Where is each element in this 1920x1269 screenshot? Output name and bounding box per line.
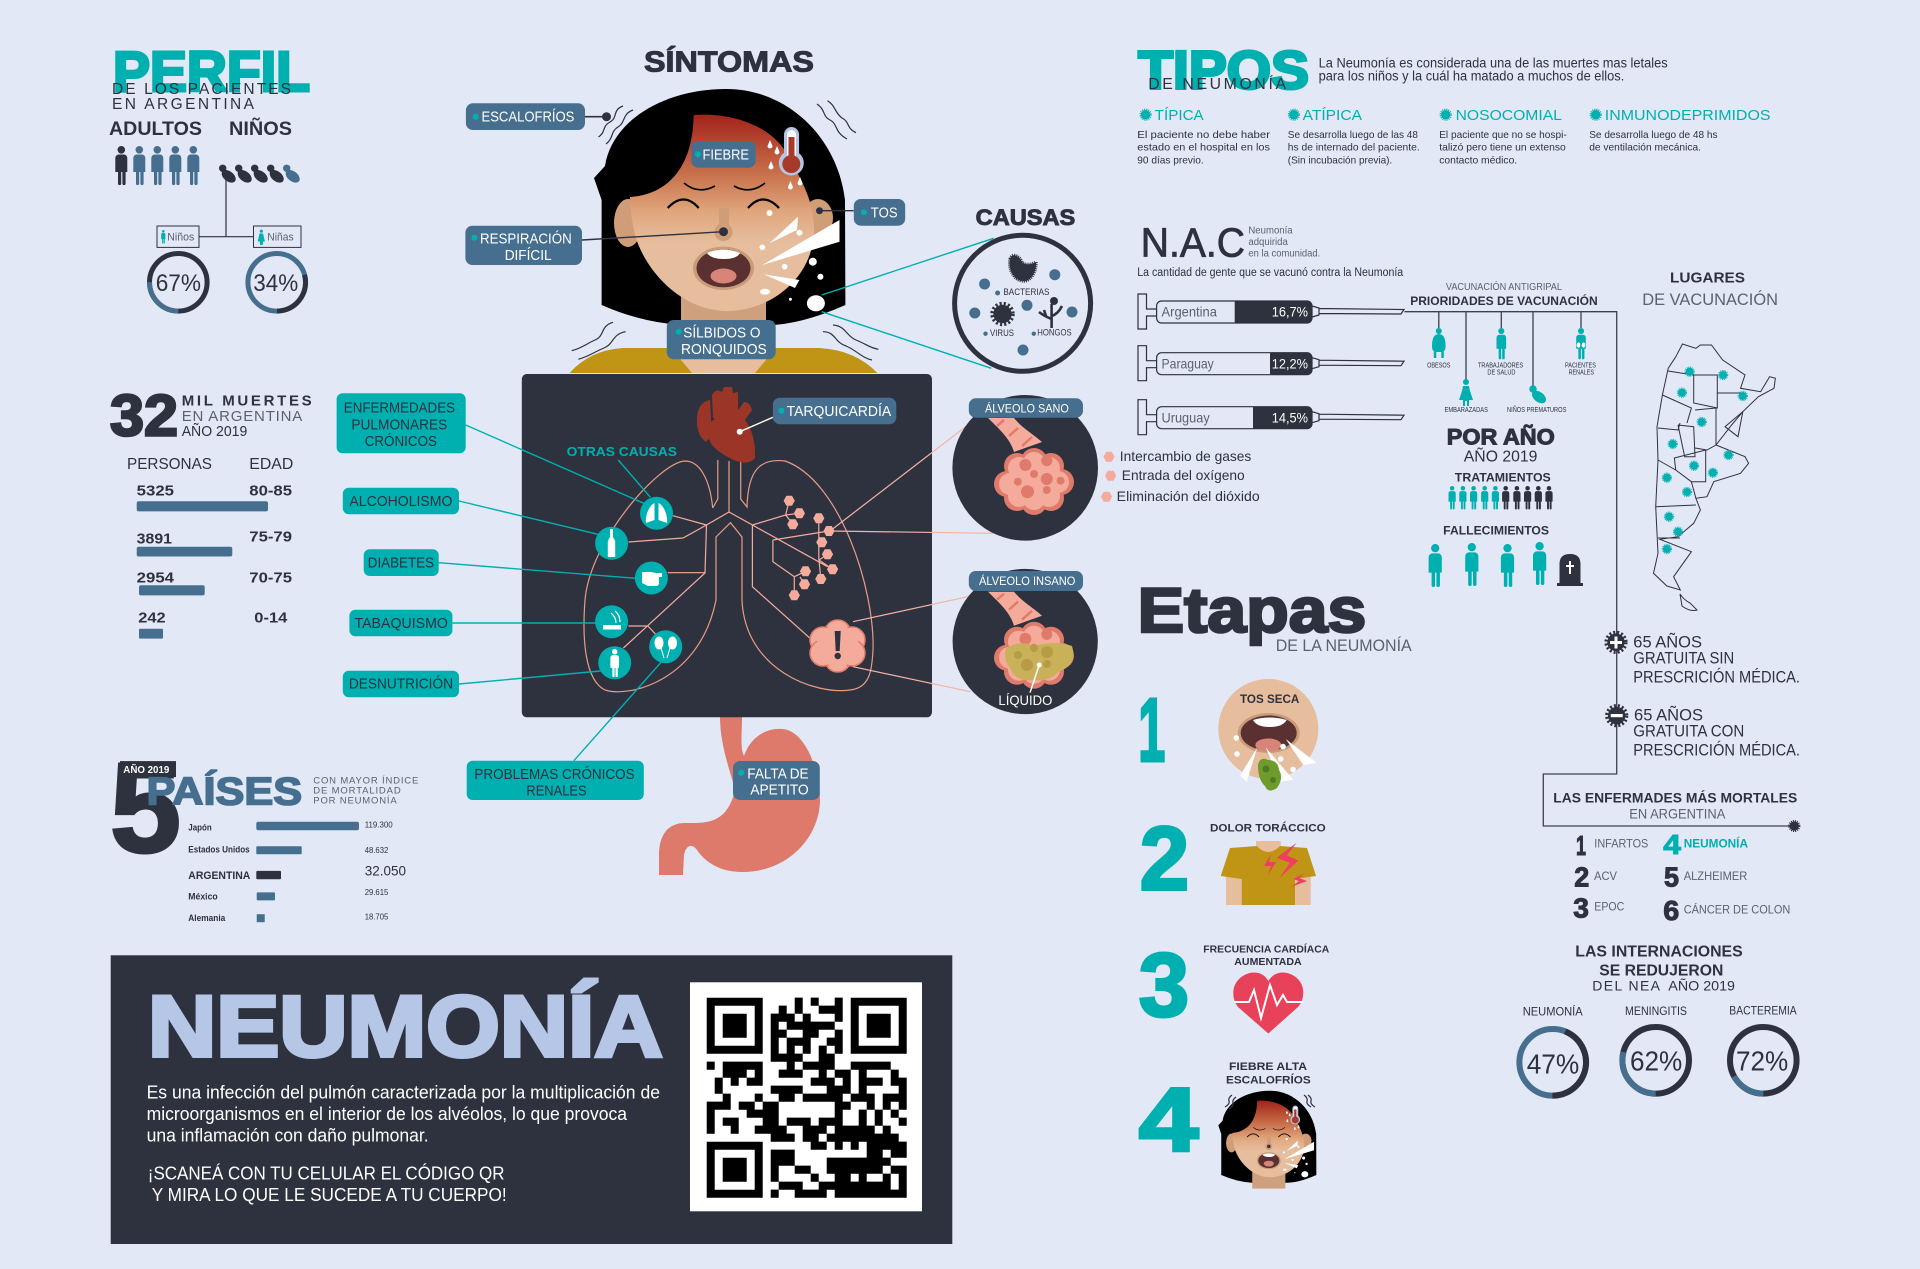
title: neumonía: NEUMONÍA xyxy=(148,979,663,1075)
heading: 5 países: PAÍSES xyxy=(146,770,302,814)
stage 3: frecuencia cardíaca aumentada xyxy=(1139,936,1329,1036)
priority: obesos: OBESOS xyxy=(1427,362,1451,369)
ranking list: 4 xyxy=(1663,829,1681,860)
illustration: patient with symptoms xyxy=(465,89,905,373)
subtitle: CON MAYOR ÍNDICE xyxy=(313,776,418,787)
type: inmunodeprimidos: Se desarrolla luego de 48 hs xyxy=(1589,129,1718,141)
label: niños: NIÑOS xyxy=(229,118,292,140)
type: atípica: ATÍPICA xyxy=(1303,107,1362,124)
heading: etapas: Etapas xyxy=(1138,576,1366,646)
callout: tos xyxy=(816,199,905,226)
row: 75-79: 3891 xyxy=(137,530,172,547)
bar chart: countries: Alemania xyxy=(188,913,226,923)
ranking list: ACV xyxy=(1594,869,1617,883)
pictogram: fallecimientos: FALLECIMIENTOS xyxy=(1443,525,1549,537)
tag: enfermedades pulmonares crónicos: ENFERMEDADES xyxy=(344,401,455,417)
syringe: paraguay: 12,2% xyxy=(1272,355,1308,371)
heading: perfil: EN ARGENTINA xyxy=(112,96,255,113)
icon: cigarette xyxy=(595,605,628,638)
bar chart: countries: 32.050 xyxy=(365,863,406,879)
panel: enfermedades más mortales xyxy=(1553,790,1799,926)
diagram: unhealthy alveolus: ÁLVEOLO INSANO xyxy=(979,573,1075,588)
type: típica xyxy=(1137,107,1271,166)
table header: PERSONAS xyxy=(127,456,212,473)
list: alveolus functions: Entrada del oxígeno xyxy=(1122,467,1245,483)
bar chart: countries: 18.705 xyxy=(365,913,389,922)
priority: pacientes renales: PACIENTES xyxy=(1565,362,1596,369)
syringe: argentina: Argentina xyxy=(1162,304,1217,320)
panel: internaciones xyxy=(1509,944,1797,1106)
panel: causas xyxy=(822,205,1091,371)
intro text: La Neumonía es considerada una de las muertes mas letales xyxy=(1319,56,1668,71)
row: 80-85: 80-85 xyxy=(249,482,292,499)
map: argentina xyxy=(1654,344,1775,610)
ranking list: INFARTOS xyxy=(1594,836,1648,850)
description: Es una infección del pulmón caracterizada por la multiplicación de xyxy=(147,1081,660,1102)
diagram: pathogens circle: HONGOS xyxy=(1037,328,1072,338)
heading: DEL NEA xyxy=(1592,978,1661,994)
ranking list: 2 xyxy=(1574,862,1589,893)
tag: alcoholismo xyxy=(343,488,459,514)
bar chart: countries: Japón xyxy=(188,823,212,833)
type: típica: El paciente no debe haber xyxy=(1137,129,1271,141)
row: 70-75: 70-75 xyxy=(249,569,292,586)
ranking list: 5 xyxy=(1664,862,1679,893)
donut: 67% xyxy=(150,253,207,311)
priority: niños prematuros: NIÑOS PREMATUROS xyxy=(1507,405,1567,414)
heading: perfil: PERFIL xyxy=(113,40,310,104)
heading: EN ARGENTINA xyxy=(1629,805,1726,821)
diagram: healthy alveolus: ÁLVEOLO SANO xyxy=(985,400,1069,415)
heading: n.a.c: Neumonía xyxy=(1248,225,1293,236)
diagram: healthy alveolus xyxy=(952,395,1098,541)
ranking list: 6 xyxy=(1663,895,1679,926)
donut: 34% xyxy=(241,247,312,318)
heading: por año: AÑO 2019 xyxy=(1464,446,1537,466)
subtitle: DE MORTALIDAD xyxy=(313,786,401,796)
callout: taquicardia: TARQUICARDÍA xyxy=(787,403,892,420)
stage 4: fiebre alta escalofríos: ESCALOFRÍOS xyxy=(1226,1074,1311,1087)
intro text xyxy=(1319,56,1668,83)
label: otras causas: OTRAS CAUSAS xyxy=(567,444,677,459)
pictogram: tratamientos: TRATAMIENTOS xyxy=(1455,473,1551,485)
stage 3: frecuencia cardíaca aumentada: 3 xyxy=(1139,936,1189,1036)
stage 1: tos seca: TOS SECA xyxy=(1240,694,1299,706)
tag: alcoholismo: ALCOHOLISMO xyxy=(349,494,452,510)
bar chart: countries: México xyxy=(188,892,218,902)
icon: bottle xyxy=(595,527,628,560)
type: nosocomial: contacto médico. xyxy=(1439,154,1517,166)
call to action xyxy=(148,1162,507,1205)
row: 80-85 xyxy=(137,482,292,511)
syringe: uruguay xyxy=(1138,400,1404,435)
stage 1: tos seca xyxy=(1138,679,1318,791)
stage 4: fiebre alta escalofríos: FIEBRE ALTA xyxy=(1229,1061,1307,1073)
ranking list: NEUMONÍA xyxy=(1684,835,1748,850)
priority: trabajadores de salud xyxy=(1478,328,1523,377)
stage 2: dolor toráccico: DOLOR TORÁCCICO xyxy=(1210,822,1326,835)
donut: neumonía 47% xyxy=(1509,1006,1596,1106)
row: 75-79 xyxy=(137,529,292,556)
row: 0-14 xyxy=(138,610,288,639)
row: 70-75 xyxy=(137,569,292,595)
callout: falta de apetito xyxy=(733,761,820,800)
type: atípica: (Sin incubación previa). xyxy=(1288,154,1392,166)
heading: etapas xyxy=(1138,576,1412,655)
tag: enfermedades pulmonares crónicos: PULMONARES xyxy=(351,417,447,433)
diagram: bronchi xyxy=(623,501,833,648)
row: 70-75: 2954 xyxy=(137,569,175,586)
heading xyxy=(1575,944,1743,994)
heading: LUGARES xyxy=(1670,269,1745,286)
panel: perfil de los pacientes xyxy=(109,40,312,318)
stage 4: fiebre alta escalofríos: 4 xyxy=(1139,1071,1198,1171)
priority: trabajadores de salud: TRABAJADORES xyxy=(1478,362,1523,369)
syringe: paraguay xyxy=(1138,346,1404,381)
note: 65 años sin prescripción: PRESCRICIÓN MÉDICA. xyxy=(1633,667,1800,686)
intro text: para los niños y la cuál ha matado a muchos de ellos. xyxy=(1319,68,1624,83)
donut: meningitis 62%: 62% xyxy=(1630,1046,1682,1077)
row: 75-79: 75-79 xyxy=(249,529,292,546)
note: 65 años sin prescripción: 65 AÑOS xyxy=(1633,632,1702,651)
panel: 32 mil muertes xyxy=(110,384,312,639)
syringe: uruguay: 14,5% xyxy=(1272,409,1308,425)
callout: respiración difícil: DIFÍCIL xyxy=(505,247,552,264)
row: 80-85: 5325 xyxy=(137,482,174,499)
panel: neumonía summary xyxy=(111,955,952,1244)
tag: enfermedades pulmonares crónicos xyxy=(337,393,466,453)
tag: enfermedades pulmonares crónicos: CRÓNICOS xyxy=(365,433,437,450)
heading: n.a.c: en la comunidad. xyxy=(1248,249,1320,260)
type: típica: estado en el hospital en los xyxy=(1137,142,1270,154)
type: inmunodeprimidos xyxy=(1589,107,1770,154)
heading: 32 mil muertes xyxy=(110,384,312,448)
icon: kidneys xyxy=(649,630,682,663)
donut: bacteremia 72%: 72% xyxy=(1736,1046,1788,1077)
heading xyxy=(1553,790,1797,821)
heading: n.a.c: adquirida xyxy=(1248,237,1288,248)
heading: PRIORIDADES DE VACUNACIÓN xyxy=(1410,293,1598,308)
list: alveolus functions: Intercambio de gases xyxy=(1120,448,1251,464)
qr code xyxy=(690,982,922,1211)
heading: por año xyxy=(1447,424,1555,466)
type: nosocomial xyxy=(1439,107,1567,166)
legend: niñas xyxy=(254,226,301,247)
note: 65 años con prescripción xyxy=(1607,706,1800,760)
type: típica: TÍPICA xyxy=(1155,107,1204,124)
stage 4: fiebre alta escalofríos xyxy=(1139,1061,1316,1189)
list: alveolus functions xyxy=(1101,448,1260,504)
legend: niños xyxy=(157,226,199,247)
type: atípica: hs de internado del paciente. xyxy=(1288,142,1420,154)
callout: sílbidos o ronquidos xyxy=(667,320,776,359)
tag: problemas crónicos renales: PROBLEMAS CRÓNICOS xyxy=(474,766,635,783)
heading: DE VACUNACIÓN xyxy=(1642,290,1778,309)
stage 3: frecuencia cardíaca aumentada: AUMENTADA xyxy=(1234,957,1302,968)
panel: n.a.c vaccination xyxy=(1137,220,1404,435)
alveoli markers xyxy=(784,496,838,600)
type: nosocomial: NOSOCOMIAL xyxy=(1456,107,1562,124)
heading: n.a.c xyxy=(1141,220,1320,266)
heading: por año: POR AÑO xyxy=(1447,424,1555,449)
bar chart: countries: 29.615 xyxy=(365,888,389,897)
row: 0-14: 0-14 xyxy=(254,610,288,627)
heading: perfil: DE LOS PACIENTES xyxy=(112,81,291,98)
callout: falta de apetito: FALTA DE xyxy=(747,766,809,782)
donut: meningitis 62%: MENINGITIS xyxy=(1625,1006,1687,1018)
heading: LAS ENFERMADES MÁS MORTALES xyxy=(1553,790,1797,805)
priority: pacientes renales xyxy=(1565,328,1596,377)
table header xyxy=(127,456,293,473)
map markers xyxy=(1663,367,1747,553)
panel: lugares de vacunación xyxy=(1642,269,1778,610)
priority: obesos xyxy=(1427,328,1451,369)
heading: LAS INTERNACIONES xyxy=(1575,944,1743,961)
type: inmunodeprimidos: de ventilación mecánica. xyxy=(1589,142,1701,154)
heading: causas: CAUSAS xyxy=(976,205,1075,230)
tag: tabaquismo: TABAQUISMO xyxy=(354,616,448,632)
callout: escalofríos xyxy=(466,103,611,130)
diagram: pathogens circle: VIRUS xyxy=(990,328,1014,338)
callout: tos: TOS xyxy=(871,206,898,222)
table header: EDAD xyxy=(249,456,293,473)
donut: meningitis 62% xyxy=(1622,1006,1689,1094)
ranking list xyxy=(1573,829,1790,926)
icon: heart xyxy=(697,387,755,463)
heading: SE REDUJERON xyxy=(1599,962,1723,979)
panel: prioridades de vacunación xyxy=(1410,280,1598,587)
heading: AÑO 2019 xyxy=(1668,978,1735,994)
bar chart: countries: 48.632 xyxy=(365,846,389,855)
diagram: unhealthy alveolus xyxy=(953,569,1098,714)
bar chart: countries: 119.300 xyxy=(365,821,393,830)
icon: tombstone xyxy=(1557,554,1583,586)
heading: 5 países: 5 xyxy=(110,737,181,879)
donut: bacteremia 72% xyxy=(1729,1006,1797,1094)
heading: etapas: DE LA NEUMONÍA xyxy=(1276,636,1412,655)
panel: etapas de la neumonía xyxy=(1138,576,1412,1189)
ranking list: 1 xyxy=(1576,830,1586,861)
icon: bacteria xyxy=(1010,255,1036,281)
note: 65 años con prescripción: 65 AÑOS xyxy=(1634,706,1703,725)
row: 0-14: 242 xyxy=(138,610,166,627)
note: 65 años sin prescripción xyxy=(1606,632,1800,686)
ranking list: CÁNCER DE COLON xyxy=(1684,901,1790,916)
callout: sílbidos o ronquidos: RONQUIDOS xyxy=(681,342,767,358)
tag: problemas crónicos renales: RENALES xyxy=(526,784,587,800)
icon: virus xyxy=(992,304,1012,324)
bar chart: countries: ARGENTINA xyxy=(188,870,250,882)
icon: alert alveolus xyxy=(810,620,865,672)
ranking list: 3 xyxy=(1573,892,1589,923)
note: 65 años con prescripción: PRESCRICIÓN MÉDICA. xyxy=(1633,741,1800,760)
type: nosocomial: talizó pero tiene un extenso xyxy=(1439,142,1566,154)
description: una inflamación con daño pulmonar. xyxy=(147,1125,429,1146)
diagram: unhealthy alveolus: LÍQUIDO xyxy=(998,692,1052,708)
subtitle xyxy=(313,776,418,807)
heading: tipos: TIPOS xyxy=(1138,40,1309,100)
organ: stomach xyxy=(659,717,820,875)
donut: 34%: 34% xyxy=(253,270,298,297)
syringe: argentina xyxy=(1138,294,1404,329)
legend: niños: Niños xyxy=(167,231,195,243)
subtitle: POR NEUMONÍA xyxy=(313,796,397,807)
donut: neumonía 47%: 47% xyxy=(1527,1048,1579,1079)
tag: diabetes xyxy=(364,549,439,576)
heading xyxy=(1642,269,1778,309)
panel: 5 países xyxy=(110,737,418,923)
note: 65 años sin prescripción: GRATUITA SIN xyxy=(1633,649,1734,667)
bar chart: countries xyxy=(188,821,406,923)
tag: desnutrición xyxy=(343,671,459,697)
icon row: babies xyxy=(219,165,302,185)
note: 65 años con prescripción: GRATUITA CON xyxy=(1633,723,1744,741)
heading: 32 mil muertes: AÑO 2019 xyxy=(182,423,247,440)
description: microorganismos en el interior de los alvéolos, lo que provoca xyxy=(147,1103,628,1124)
callout: taquicardia xyxy=(737,398,896,435)
type: típica: 90 días previo. xyxy=(1137,154,1204,166)
heading: síntomas: SÍNTOMAS xyxy=(644,45,814,79)
priority: embarazadas: EMBARAZADAS xyxy=(1444,407,1488,414)
type: nosocomial: El paciente que no se hospi- xyxy=(1439,129,1567,141)
callout: falta de apetito: APETITO xyxy=(750,782,809,798)
stage 2: dolor toráccico xyxy=(1140,810,1326,910)
list: alveolus functions: Eliminación del dióxido xyxy=(1117,488,1260,504)
label: adultos: ADULTOS xyxy=(109,119,202,140)
heading: tipos: DE NEUMONÍA xyxy=(1148,74,1286,93)
tag: diabetes: DIABETES xyxy=(368,556,434,572)
heading: 5 países: AÑO 2019 xyxy=(123,763,169,776)
diagram: lungs outline xyxy=(584,460,873,692)
ranking list: EPOC xyxy=(1594,900,1625,914)
icon: lungs xyxy=(640,497,673,530)
priority: trabajadores de salud: DE SALUD xyxy=(1487,370,1516,377)
stage 3: frecuencia cardíaca aumentada: FRECUENCIA CARDÍACA xyxy=(1203,943,1329,956)
heading xyxy=(1410,280,1598,308)
callout: fiebre xyxy=(691,141,756,168)
callout: respiración difícil xyxy=(465,226,724,265)
call to action: Y MIRA LO QUE LE SUCEDE A TU CUERPO! xyxy=(152,1184,507,1205)
subtitle: La cantidad de gente que se vacunó contra la Neumonía xyxy=(1137,267,1404,279)
heading: n.a.c: N.A.C xyxy=(1141,220,1245,266)
heading: 32 mil muertes: EN ARGENTINA xyxy=(182,408,302,425)
stage 1: tos seca: 1 xyxy=(1138,681,1165,781)
type: atípica: Se desarrolla luego de las 48 xyxy=(1288,129,1418,141)
syringe: argentina: 16,7% xyxy=(1272,304,1308,320)
diagram: pathogens circle: BACTERIAS xyxy=(1003,287,1049,297)
heading: 5 países xyxy=(110,737,302,879)
donut: 67%: 67% xyxy=(156,270,201,297)
callout: respiración difícil: RESPIRACIÓN xyxy=(480,230,572,248)
shirt xyxy=(570,348,878,373)
connector line: vaccination priorities xyxy=(1404,312,1795,826)
donut: neumonía 47%: NEUMONÍA xyxy=(1523,1006,1583,1019)
callout: sílbidos o ronquidos: SÍLBIDOS O xyxy=(683,324,760,342)
priority: pacientes renales: RENALES xyxy=(1569,370,1594,377)
icon: person xyxy=(598,646,631,679)
tag: tabaquismo xyxy=(349,610,452,636)
callouts: risk factors xyxy=(337,393,662,800)
donut: bacteremia 72%: BACTEREMIA xyxy=(1729,1006,1797,1018)
bar chart: countries: Estados Unidos xyxy=(188,844,250,854)
call to action: ¡SCANEÁ CON TU CELULAR EL CÓDIGO QR xyxy=(148,1162,505,1183)
heading: 32 mil muertes: MIL MUERTES xyxy=(182,392,312,409)
type: atípica xyxy=(1288,107,1420,166)
panel: tipos de neumonía xyxy=(1137,40,1770,166)
icon row: adults xyxy=(115,146,199,185)
description xyxy=(147,1081,660,1146)
pictogram: fallecimientos xyxy=(1429,525,1583,587)
legend: niñas: Niñas xyxy=(267,231,294,243)
priority: niños prematuros xyxy=(1507,385,1567,414)
ranking list: ALZHEIMER xyxy=(1684,869,1748,883)
heading: VACUNACIÓN ANTIGRIPAL xyxy=(1446,280,1562,293)
type: inmunodeprimidos: INMUNODEPRIMIDOS xyxy=(1605,107,1770,124)
priority: embarazadas xyxy=(1444,379,1488,414)
panel: lungs xyxy=(522,374,993,717)
syringe: paraguay: Paraguay xyxy=(1162,355,1214,371)
heading: 32 mil muertes: 32 xyxy=(110,384,178,448)
stage 2: dolor toráccico: 2 xyxy=(1140,810,1189,910)
tag: desnutrición: DESNUTRICIÓN xyxy=(349,675,453,692)
callout: escalofríos: ESCALOFRÍOS xyxy=(482,108,574,126)
tag: problemas crónicos renales xyxy=(467,761,644,800)
pictogram: tratamientos xyxy=(1448,473,1553,509)
callout: fiebre: FIEBRE xyxy=(702,148,749,164)
diagram: pathogens circle xyxy=(955,235,1091,371)
syringe: uruguay: Uruguay xyxy=(1162,409,1210,425)
icon: hand xyxy=(635,562,668,594)
icon: hongos xyxy=(1039,304,1062,328)
